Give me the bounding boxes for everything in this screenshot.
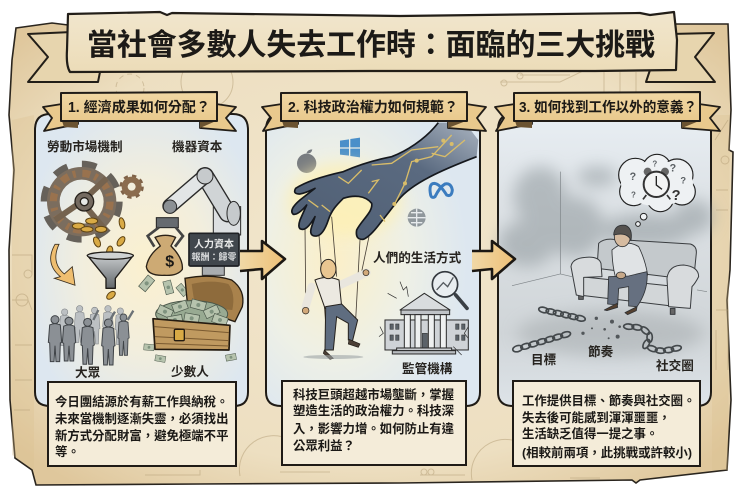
thought bubble with clock: ? (680, 175, 686, 185)
panel 2: tech political power (262, 92, 486, 465)
icon: grey logo (408, 209, 426, 227)
falling banknotes (139, 275, 237, 363)
panel 1 text box: 等。 (55, 444, 80, 459)
arrow: gear to crowd (51, 244, 75, 285)
label: social circle: 社交圈 (656, 358, 694, 373)
icon: windows logo (340, 138, 360, 157)
thought bubble with clock (619, 154, 695, 226)
coins (72, 217, 127, 301)
label: machine capital: 機器資本 (172, 139, 223, 154)
icon: money bag (146, 235, 182, 275)
icon: meta logo (430, 183, 452, 197)
icon: seated person (604, 225, 648, 315)
panel 3: meaning beyond work (495, 92, 720, 466)
panel 3 illustration (499, 154, 714, 357)
thought bubble with clock: ? (652, 160, 657, 169)
panel 3 text box: 生活缺乏值得一提之事。 (522, 426, 658, 441)
sign: human capital (189, 233, 239, 275)
grey fog room (499, 167, 714, 357)
panel 1 illustration (46, 166, 243, 365)
sign: human capital: 人力資本 (194, 238, 234, 251)
panel 1 text box: 未來當機制逐漸失靈，必須找出 (55, 411, 228, 426)
arrow: panel 1 to panel 2 (240, 241, 285, 279)
banner right tail (646, 33, 715, 82)
panel 2 text box: 科技巨頭超越市場壟斷，掌握 (293, 387, 455, 402)
panel 3 background (498, 114, 711, 406)
label: regulators: 監管機構 (402, 361, 453, 376)
thought bubble with clock: ? (630, 171, 636, 183)
panel 2 illustration (288, 123, 478, 359)
panel 3 ribbon: 3. 如何找到工作以外的意義？ (519, 98, 697, 116)
panel 2 ribbon: 2. 科技政治權力如何規範？ (288, 98, 458, 116)
icon: apple logo (297, 149, 316, 173)
icon: crowd (48, 306, 133, 365)
label: way of life: 人們的生活方式 (373, 250, 462, 265)
label: purpose: 目標 (531, 352, 557, 367)
panel 2 text box: 塑造生活的政治權力。科技深 (293, 403, 455, 418)
glow behind hand (288, 163, 402, 237)
icon: robot arm (148, 168, 241, 247)
icon: regulator building (379, 282, 468, 355)
banner body (67, 12, 677, 72)
panel 2 ribbon (262, 92, 486, 131)
panel 1 text box (48, 382, 236, 466)
panel 2 text box (282, 381, 466, 465)
panel 1: economic outcomes (35, 92, 248, 466)
panel 3 text box (513, 381, 700, 466)
icon: sofa (571, 239, 699, 314)
label: the many: 大眾 (75, 365, 101, 380)
panel 3 text box: (相較前兩項，此挑戰或許較小) (522, 445, 692, 460)
panel 2 text box: 入，影響力增。如何防止有違 (293, 421, 455, 436)
panel 1 background (35, 114, 248, 406)
arrow: panel 2 to panel 3 (472, 241, 515, 279)
thought bubble with clock: ? (670, 163, 676, 175)
panel 1 ribbon (43, 92, 236, 131)
panel 2 text box: 公眾利益？ (293, 438, 355, 453)
panel 1 ribbon: 1. 經濟成果如何分配？ (68, 98, 210, 116)
title: 當社會多數人失去工作時：面臨的三大挑戰 (87, 29, 655, 62)
label: the few: 少數人 (171, 365, 209, 379)
panel 3 text box: 失去後可能感到渾渾噩噩， (522, 410, 671, 425)
panel 3 ribbon (495, 92, 720, 131)
label: rhythm: 節奏 (588, 344, 614, 359)
icon: puppet person (302, 259, 369, 359)
panel 2 background (266, 114, 480, 406)
puppet strings (305, 217, 369, 337)
panel 1 text box: 新方式分配財富，避免極端不平 (55, 428, 228, 443)
icon: broken chains (512, 306, 682, 354)
icon: robotic hand (292, 123, 478, 239)
icon: rusty gear (46, 166, 142, 238)
sign: human capital: 報酬：歸零 (192, 251, 236, 262)
banner left tail (28, 32, 100, 82)
icon: magnifying glass (432, 272, 467, 308)
label: labour market: 勞動市場機制 (47, 139, 123, 154)
icon: funnel (87, 252, 133, 288)
thought bubble with clock: ? (631, 190, 636, 199)
title banner (28, 12, 715, 82)
panel 1 text box: 今日團結源於有薪工作與納稅。 (55, 394, 228, 409)
panel 3 text box: 工作提供目標、節奏與社交圈。 (522, 393, 695, 408)
icon: treasure chest (153, 276, 243, 350)
thought bubble with clock: ? (672, 188, 681, 204)
icon: money bag: $ (165, 254, 174, 271)
